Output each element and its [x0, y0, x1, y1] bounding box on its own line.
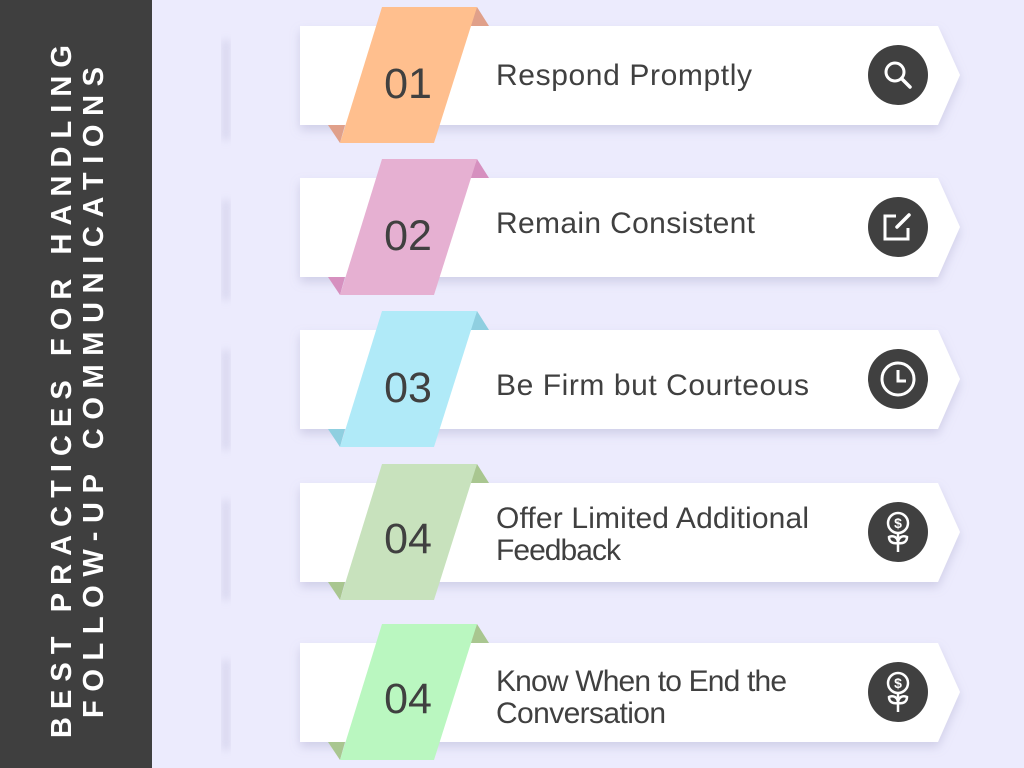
icon: money plant [868, 502, 928, 562]
icon: money plant [868, 662, 928, 722]
row 2: Remain Consistent: 02 [384, 212, 432, 260]
row 2: Remain Consistent [300, 159, 960, 295]
row 4: Offer Limited Additional Feedback [300, 464, 960, 600]
row 3: Be Firm but Courteous: Be Firm but Courteous [496, 369, 809, 402]
row 5: Know When to End the Conversation: Conversation [496, 697, 666, 730]
title: FOLLOW-UP COMMUNICATIONS [78, 67, 110, 718]
row 2: Remain Consistent: Remain Consistent [496, 207, 756, 240]
row 5: Know When to End the Conversation [300, 624, 960, 760]
row 5: Know When to End the Conversation: 04 [384, 675, 432, 723]
row 4: Offer Limited Additional Feedback: 04 [384, 515, 432, 563]
row 1: Respond Promptly [300, 7, 960, 143]
left title panel [0, 0, 152, 768]
row 5: Know When to End the Conversation: Know When to End the [496, 665, 787, 698]
row 4: Offer Limited Additional Feedback: Feedback [496, 534, 622, 567]
row 4: Offer Limited Additional Feedback: Offer Limited Additional [496, 502, 809, 535]
icon: money plant: $ [894, 675, 902, 691]
icon: money plant: $ [894, 515, 902, 531]
icon: clock [868, 349, 928, 409]
row 3: Be Firm but Courteous [300, 311, 960, 447]
row 1: Respond Promptly: 01 [384, 60, 432, 108]
icon: search [868, 45, 928, 105]
row 3: Be Firm but Courteous: 03 [384, 364, 432, 412]
icon: edit [868, 197, 928, 257]
title: BEST PRACTICES FOR HANDLING [46, 45, 78, 738]
row 1: Respond Promptly: Respond Promptly [496, 59, 752, 92]
title [46, 45, 110, 738]
